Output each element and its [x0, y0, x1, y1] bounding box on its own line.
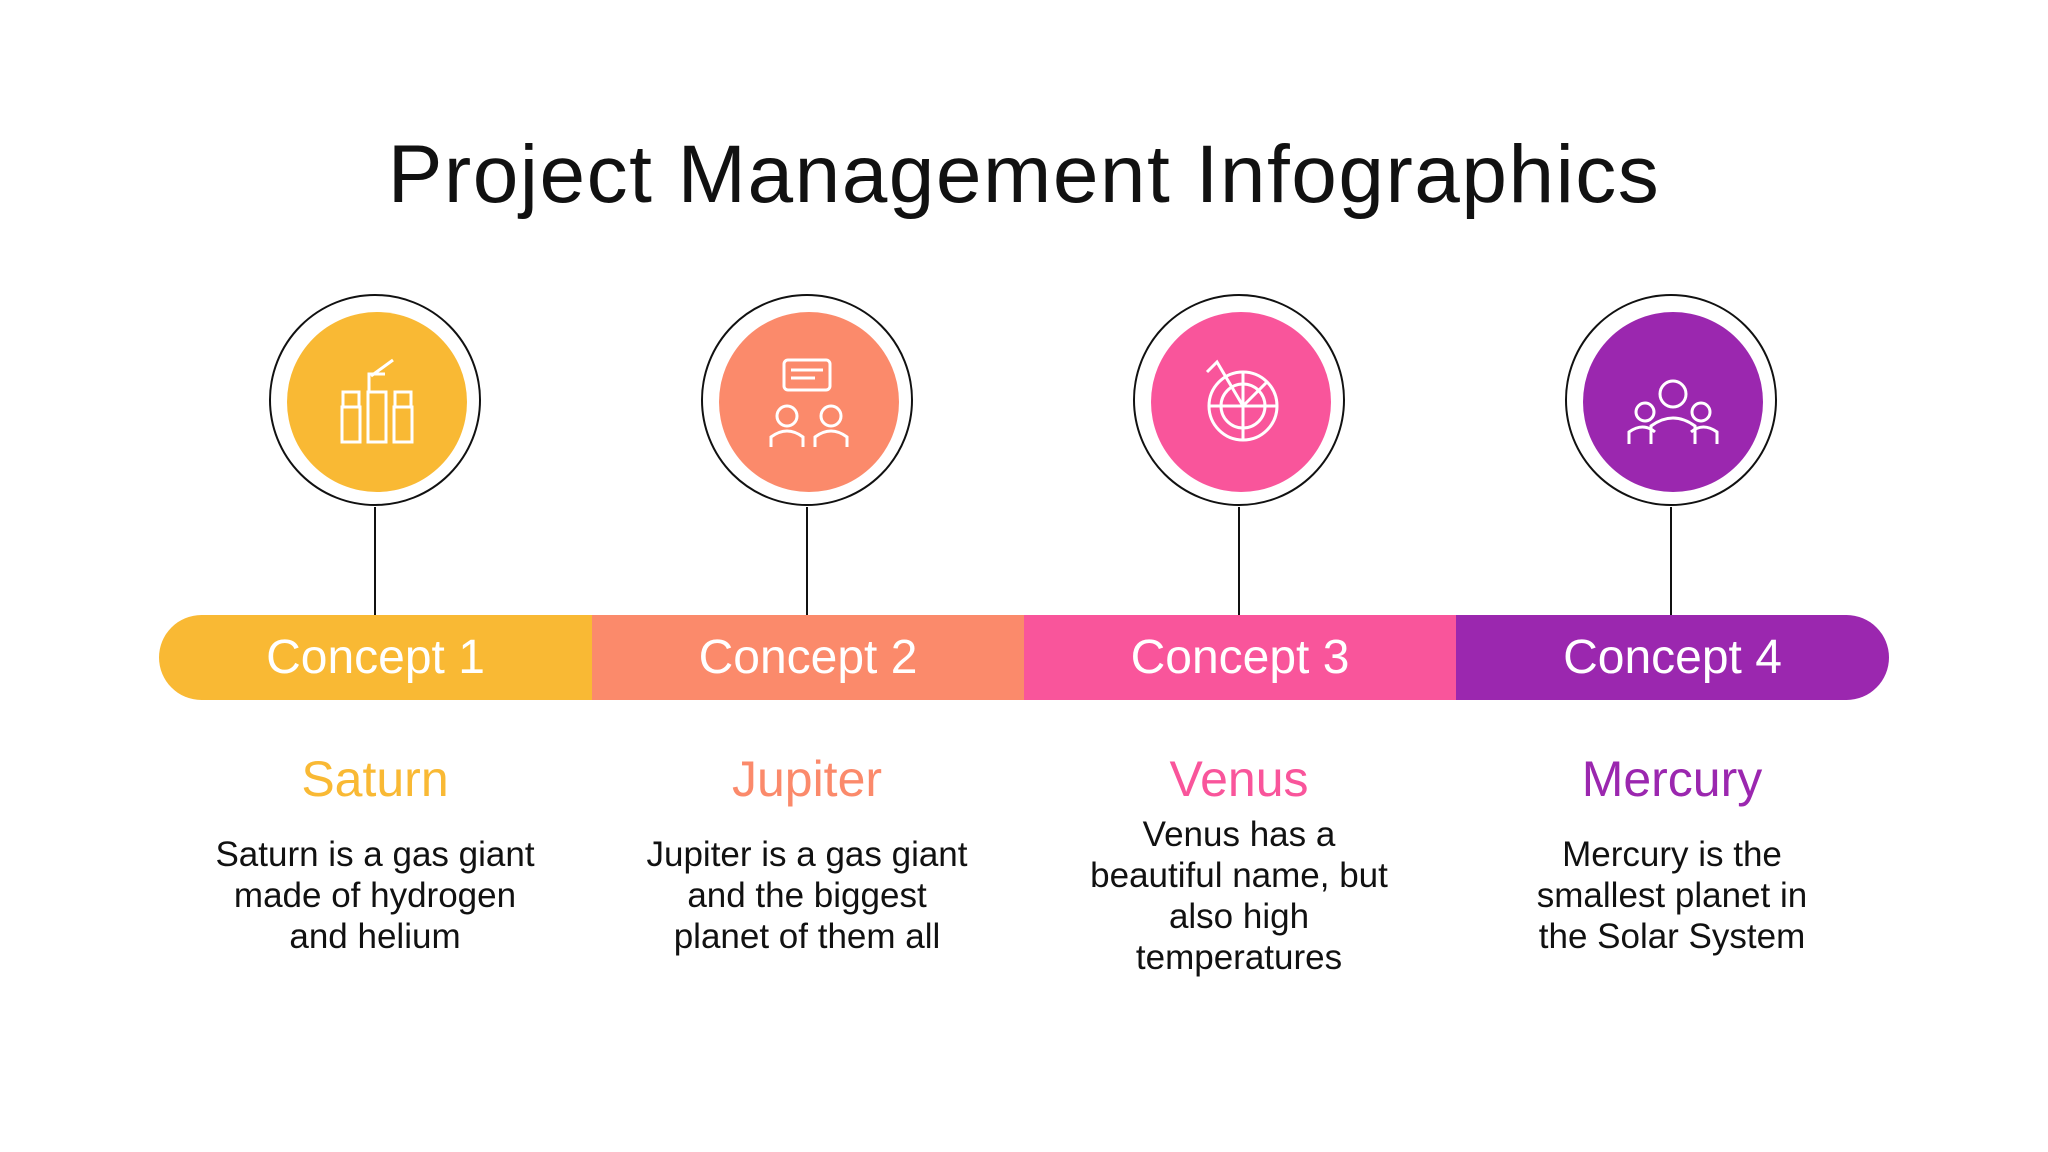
icon circle 2	[701, 294, 913, 506]
concept 4: Concept 4	[1563, 631, 1782, 684]
icon circle 3	[1133, 294, 1345, 506]
text: Venus: temperatures	[1136, 938, 1342, 977]
text: Jupiter: and the biggest	[687, 876, 927, 915]
text: Jupiter	[646, 835, 968, 956]
text: Mercury	[1537, 835, 1807, 956]
text: Mercury: Mercury is the	[1562, 835, 1782, 874]
concept 2	[592, 615, 1024, 700]
text: Saturn	[215, 835, 535, 956]
connector lines	[374, 507, 1672, 615]
concept 2: Concept 2	[699, 631, 917, 684]
text: Venus: beautiful name, but	[1090, 856, 1388, 895]
text: Saturn: and helium	[289, 917, 461, 956]
text: Jupiter: Jupiter is a gas giant	[646, 835, 968, 874]
text: Saturn: Saturn is a gas giant	[215, 835, 535, 874]
text: Saturn: made of hydrogen	[234, 876, 516, 915]
text: Mercury: smallest planet in	[1537, 876, 1807, 915]
heading: Venus: Venus	[1169, 751, 1308, 807]
title: Project Management Infographics	[388, 129, 1660, 220]
concept 4	[1456, 615, 1889, 700]
concept 1: Concept 1	[266, 631, 485, 684]
concept 3: Concept 3	[1131, 631, 1349, 684]
concept 3	[1024, 615, 1456, 700]
heading: Mercury: Mercury	[1582, 751, 1762, 807]
text: Jupiter: planet of them all	[674, 917, 940, 956]
heading: Jupiter: Jupiter	[732, 751, 882, 807]
icon circle 4	[1565, 294, 1777, 506]
text: Venus: also high	[1169, 897, 1309, 936]
text: Mercury: the Solar System	[1539, 917, 1805, 956]
icon circle 1	[269, 294, 481, 506]
text: Venus	[1090, 815, 1388, 977]
text: Venus: Venus has a	[1143, 815, 1335, 854]
bar: concepts	[159, 615, 1889, 700]
heading: Saturn: Saturn	[301, 751, 449, 807]
concept 1	[159, 615, 592, 700]
